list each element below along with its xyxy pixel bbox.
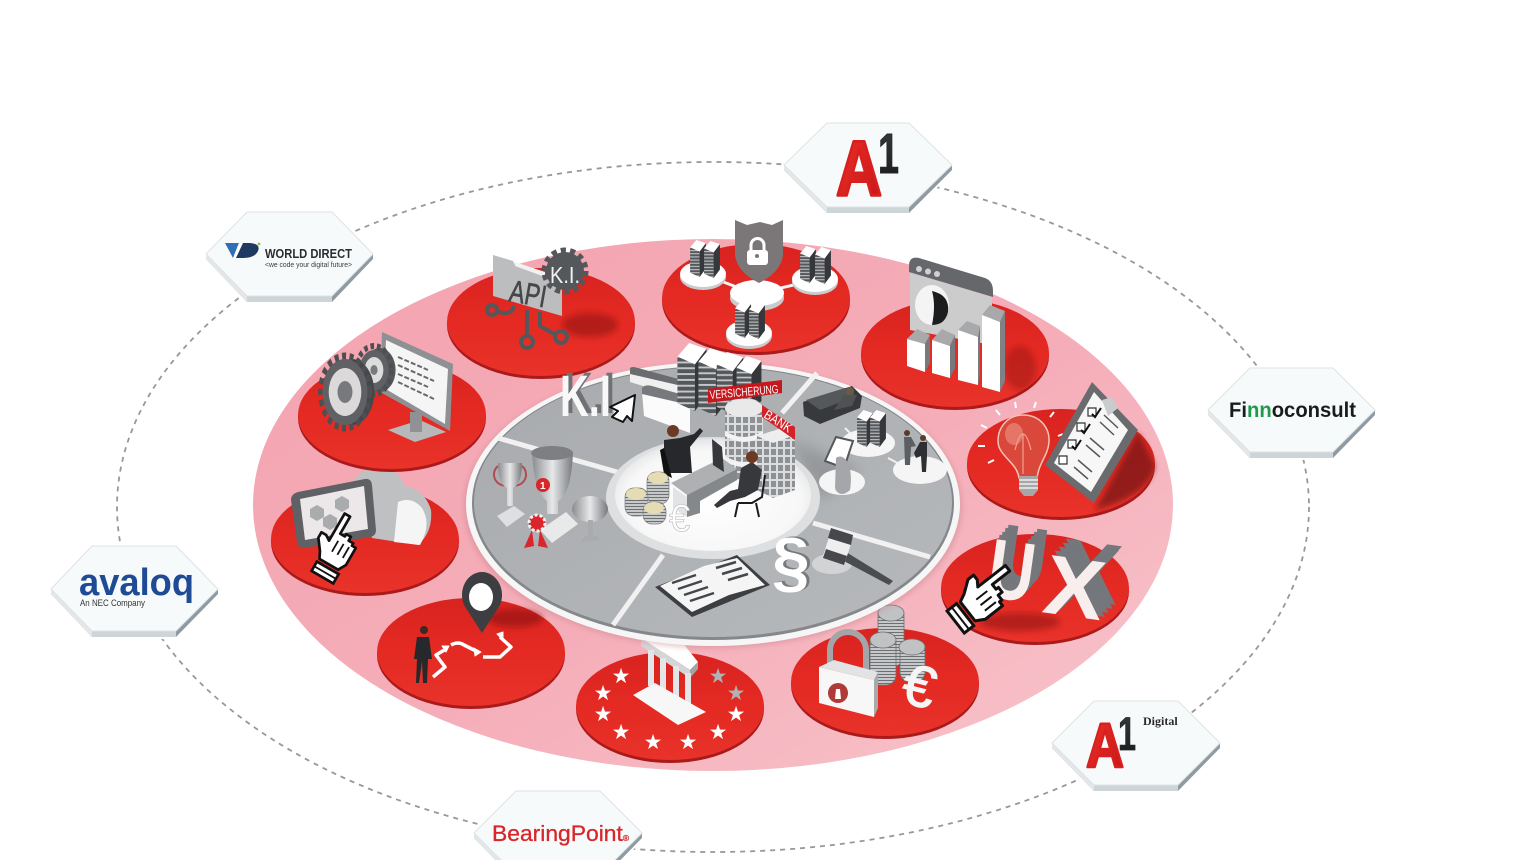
panel: central grey disc [464, 343, 962, 648]
icon: handshake figures [893, 430, 947, 484]
icon: central hub [730, 280, 784, 311]
icon: paragraph sign: § [772, 524, 810, 600]
icon: arrow cursor [610, 395, 635, 422]
icon: gavel [812, 528, 893, 585]
icon: gears [321, 346, 396, 428]
icon: trophies: 1 [540, 481, 546, 492]
icon: sofa [803, 386, 862, 424]
icon: euro sign: € [669, 498, 690, 540]
icon: pointer hand [940, 556, 1024, 635]
icon: pointer hand [302, 508, 368, 584]
panel: EU regulation disc [576, 632, 764, 763]
partner hexagon: BearingPoint [474, 791, 642, 860]
icon: bank temple [633, 632, 706, 725]
icon: open law book [655, 555, 770, 617]
panel: cloud and tablet disc [271, 467, 459, 596]
icon: star ring: ★ [679, 731, 697, 754]
icon: tablet on pedestal [819, 437, 865, 495]
icon: desk [671, 439, 737, 517]
icon: trophies [494, 446, 608, 543]
icon: K.I. gear [545, 251, 585, 291]
logo: avaloq: An NEC Company [80, 598, 145, 608]
dashed partner orbit [117, 162, 1309, 852]
icon: checklist clipboard [1045, 382, 1138, 503]
panel: inner white platform [606, 437, 820, 559]
partner hexagon: A1 Digital [1052, 701, 1220, 791]
logo: A1: A [836, 124, 882, 212]
icon: monitor [380, 332, 453, 442]
icon: UX letters: U [985, 517, 1044, 616]
segment dividers [498, 373, 930, 625]
icon: tablet [291, 479, 376, 548]
icon: star ring: ★ [727, 682, 745, 705]
pink platform [253, 239, 1173, 771]
logo: World Direct text: WORLD DIRECT [265, 247, 352, 261]
panel: savings disc [791, 605, 979, 739]
panel: customer journey disc [377, 572, 565, 709]
panel: API and K.I. disc [447, 251, 635, 379]
icon: route arrows [433, 632, 511, 677]
icon: UX letters: X [1038, 537, 1111, 638]
icon: padlock [819, 632, 878, 717]
icon: coin stacks [870, 605, 925, 685]
icon: UX letters: X [1042, 533, 1115, 634]
chart: white 3D bars [907, 305, 1005, 392]
icon: star ring: ★ [709, 665, 727, 688]
logo: A1 Digital: Digital [1143, 714, 1178, 728]
icon: office counter [630, 367, 694, 433]
partner hexagon: World Direct [206, 212, 373, 302]
icon: person left [660, 425, 703, 478]
icon: K.I. letters: K.I. [560, 364, 622, 429]
partner hexagon: A1 [784, 122, 952, 213]
logo: World Direct text [265, 247, 352, 269]
icon: UX letters: X [1046, 529, 1119, 630]
icon: paragraph sign: § [775, 523, 813, 599]
icon: star ring: ★ [644, 731, 662, 754]
icon: network links [705, 275, 815, 294]
panel: security disc [662, 220, 850, 355]
icon: UX letters: U [982, 521, 1041, 620]
icon: server racks [677, 343, 761, 416]
icon: server nodes [680, 240, 838, 349]
icon: UX letters: X [1050, 525, 1123, 626]
icon: API folder: API [507, 273, 549, 314]
icon: insurance tower [725, 398, 763, 480]
icon: euro sign: € [896, 651, 943, 722]
icon: star ring: ★ [612, 721, 630, 744]
icon: UX letters: U [988, 514, 1047, 613]
icon: security shield [735, 220, 783, 283]
icon: star ring [594, 665, 745, 754]
logo: avaloq: avaloq [79, 562, 194, 604]
icon: light bulb [978, 402, 1063, 496]
icon: K.I. letters: K.I. [564, 361, 626, 426]
callout: BANK sign: BANK [761, 407, 795, 436]
logo: A1 Digital: A [1086, 711, 1124, 781]
logo: World Direct text: <we code your digital future> [265, 262, 352, 269]
icon: UX letters: U [991, 510, 1050, 609]
panel: UX disc [940, 507, 1129, 645]
icon: coin stacks [625, 472, 669, 524]
icon: cloud [352, 467, 431, 545]
icon: UX letters: U [994, 507, 1053, 606]
icon: K.I. gear: K.I. [550, 262, 580, 288]
logo: World Direct mark [225, 243, 260, 258]
panel: ideas disc [967, 382, 1155, 520]
icon: UX letters: X [1053, 521, 1126, 622]
logo: Finnoconsult: Finnoconsult [1229, 399, 1356, 422]
callout: VERSICHERUNG sign: VERSICHERUNG [709, 382, 779, 402]
logo: A1: 1 [878, 122, 899, 186]
logo: A1 Digital: 1 [1118, 707, 1136, 760]
logo: BearingPoint: BearingPoint ® [492, 821, 629, 846]
icon: UX letters [982, 507, 1126, 638]
shadow of central scene [790, 440, 860, 500]
icon: star ring: ★ [594, 703, 612, 726]
partner hexagon: Finnoconsult [1208, 368, 1375, 458]
panel: software settings disc [298, 332, 486, 472]
icon: server on pedestal [841, 410, 903, 466]
icon: location pin [462, 572, 502, 633]
icon: API folder [493, 255, 562, 316]
icon: API circuit [487, 305, 567, 348]
panel: analytics disc [861, 258, 1049, 410]
partner hexagon: avaloq [51, 546, 218, 637]
icon: business person [414, 626, 432, 683]
logo: A1 Digital [1086, 707, 1178, 781]
icon: bank tower [757, 428, 795, 498]
icon: star ring: ★ [709, 721, 727, 744]
icon: star ring: ★ [612, 665, 630, 688]
icon: award ribbon [524, 515, 548, 548]
icon: star ring: ★ [727, 703, 745, 726]
icon: browser window with pie [909, 258, 993, 345]
icon: person right [714, 451, 765, 517]
icon: star ring: ★ [594, 682, 612, 705]
